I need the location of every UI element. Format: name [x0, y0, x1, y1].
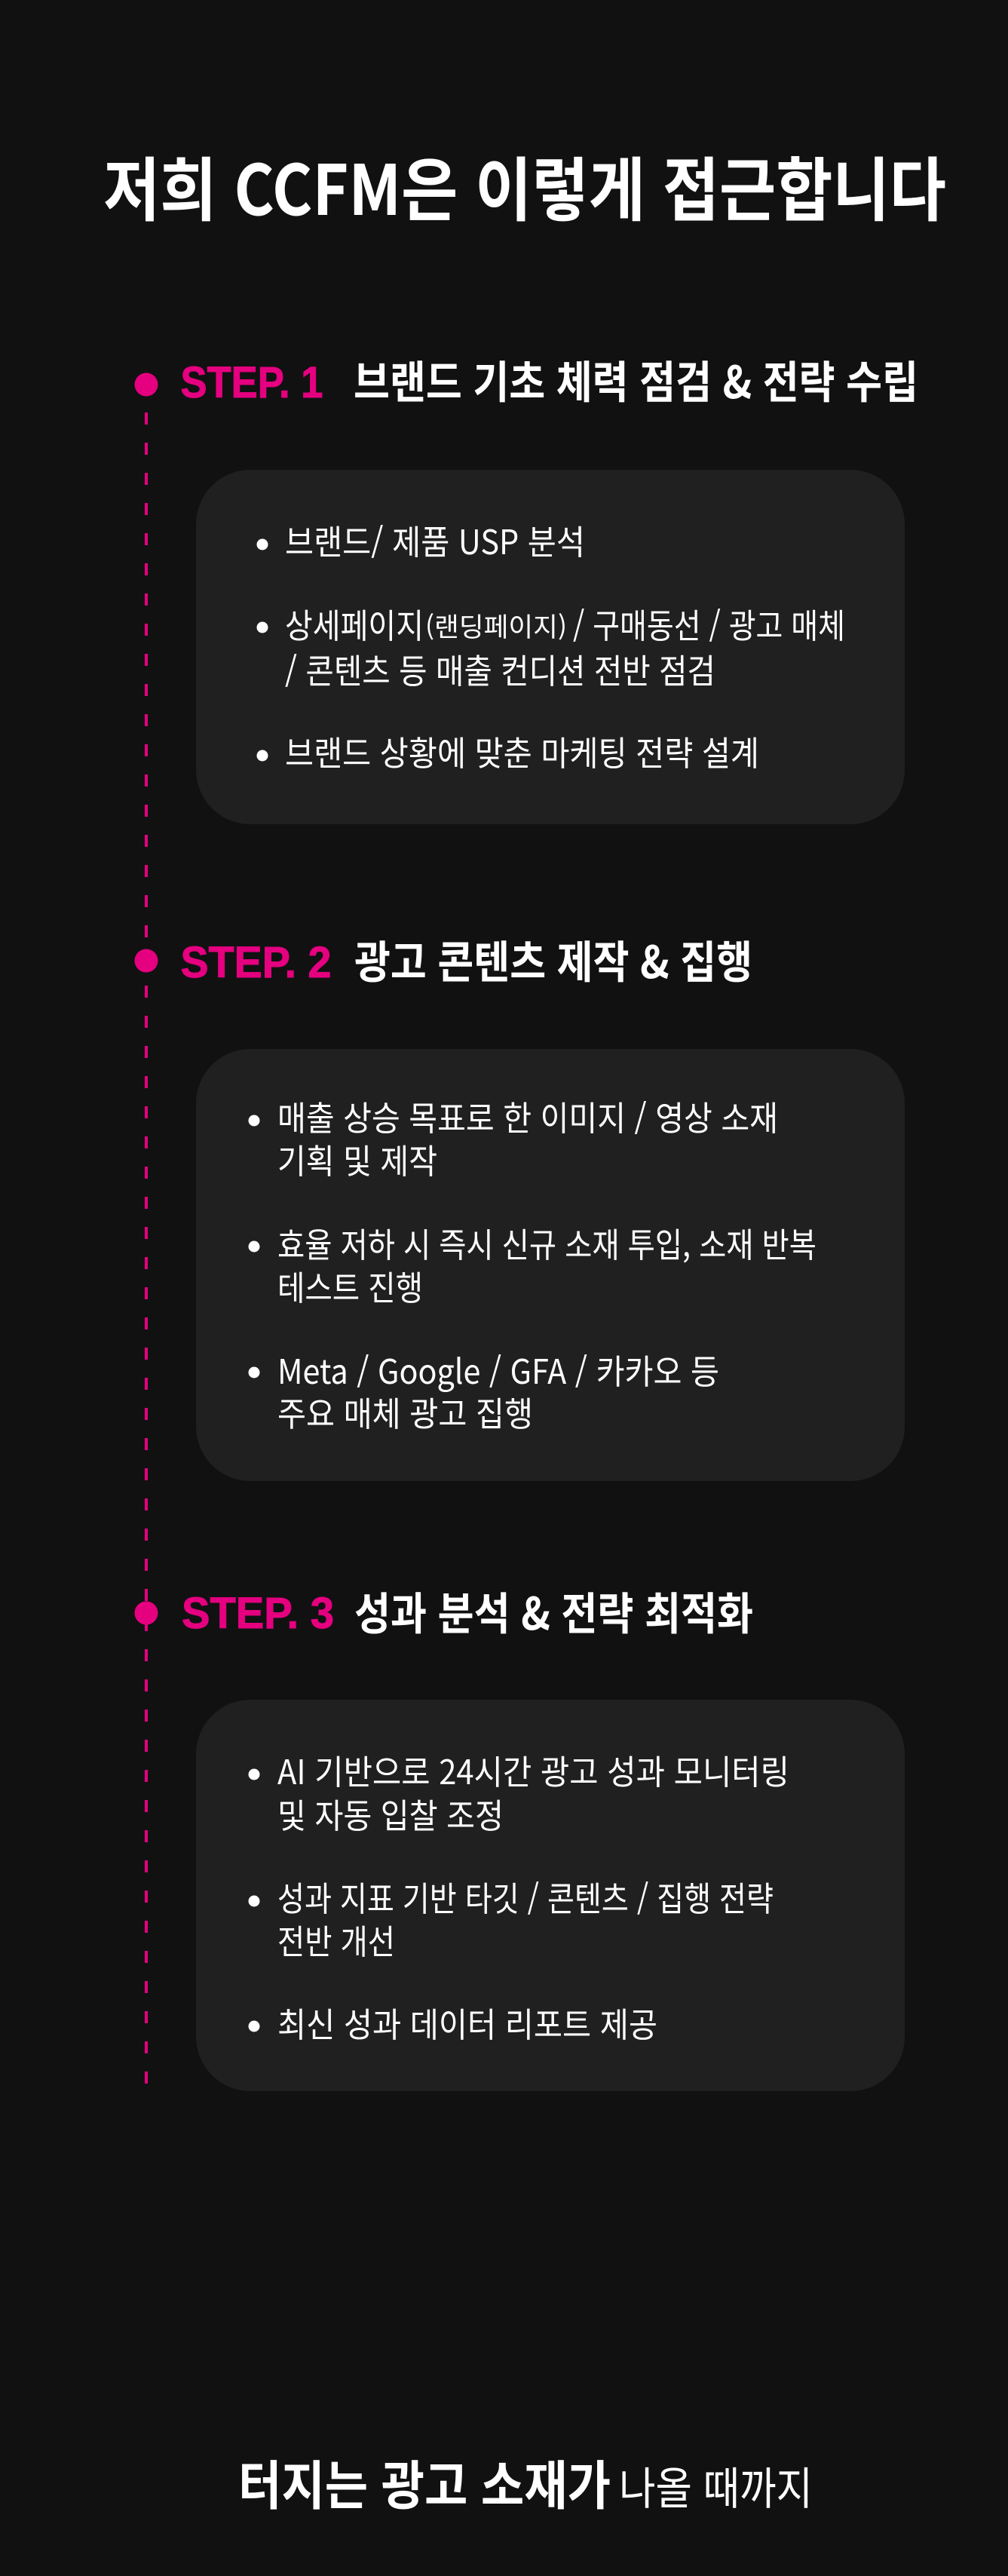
bullet 3: 최신 성과 데이터 리포트 제공 [277, 1998, 657, 2047]
bullet 2: 상세페이지 [285, 599, 424, 648]
step 2 heading [134, 927, 752, 991]
bullet 2 [256, 599, 845, 693]
bullet 1: 매출 상승 목표로 한 이미지 / 영상 소재 [277, 1091, 778, 1140]
bullet 1: 기획 및 제작 [277, 1134, 437, 1183]
bullet 2 [249, 1872, 774, 1964]
panel: step 2 [196, 1049, 905, 1481]
bullet 1: 브랜드/ 제품 USP 분석 [285, 515, 585, 564]
bullet 3 [249, 1345, 719, 1436]
step 1 heading [134, 347, 918, 411]
bullet 3: 주요 매체 광고 집행 [277, 1387, 533, 1436]
bullet 3: Meta / Google / GFA / 카카오 등 [277, 1345, 719, 1394]
bullet 1 [249, 1745, 789, 1838]
bullet 2 [249, 1218, 817, 1310]
footer tagline: 터지는 광고 소재가 [238, 2444, 611, 2520]
bullet 2: / 구매동선 / 광고 매체 [573, 599, 845, 648]
bullet 2: 성과 지표 기반 타깃 / 콘텐츠 / 집행 전략 [277, 1872, 774, 1921]
panel: step 3 [196, 1700, 905, 2091]
bullet 2: (랜딩페이지) [425, 606, 567, 645]
timeline: dashed line [145, 412, 148, 2084]
bullet 2: 효율 저하 시 즉시 신규 소재 투입, 소재 반복 [277, 1218, 817, 1267]
step 1 title: 브랜드 기초 체력 점검 & 전략 수립 [354, 347, 918, 411]
bullet 1 [249, 1091, 778, 1183]
step 2 title: 광고 콘텐츠 제작 & 집행 [354, 927, 752, 991]
step 3 marker [134, 1602, 158, 1624]
step 2 label: STEP. 2 [181, 938, 332, 987]
panel: step 1 [196, 470, 905, 824]
bullet 2: 전반 개선 [277, 1915, 395, 1964]
footer tagline: 나올 때까지 [619, 2453, 813, 2517]
bullet 3: 브랜드 상황에 맞춘 마케팅 전략 설계 [285, 726, 759, 775]
bullet 2: / 콘텐츠 등 매출 컨디션 전반 점검 [285, 644, 715, 693]
step 1 marker [134, 373, 158, 397]
step 3 title: 성과 분석 & 전략 최적화 [354, 1578, 753, 1642]
bullet 1: 및 자동 입찰 조정 [277, 1789, 504, 1838]
step 2 marker [134, 949, 158, 973]
step 1 label: STEP. 1 [181, 358, 323, 407]
bullet 2: 테스트 진행 [277, 1261, 423, 1310]
bullet 1: AI 기반으로 24시간 광고 성과 모니터링 [277, 1745, 789, 1794]
step 3 label: STEP. 3 [182, 1589, 334, 1638]
step 3 heading [134, 1578, 753, 1642]
